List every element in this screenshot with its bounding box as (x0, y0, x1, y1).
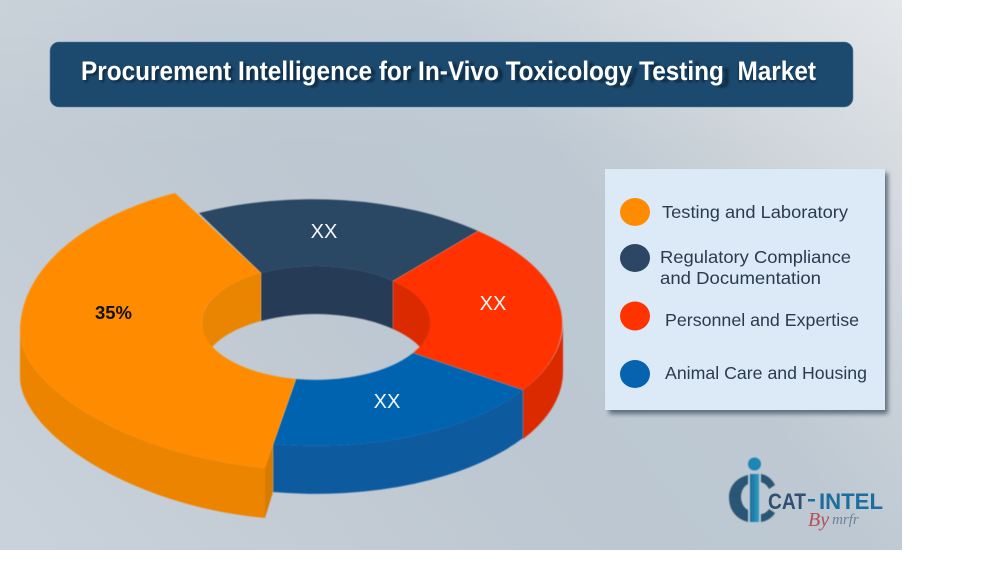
logo byline: mrfr (832, 512, 859, 528)
legend item: testing and laboratory (620, 198, 848, 226)
legend item: animal care and housing (620, 360, 867, 388)
logo byline: By (808, 509, 829, 531)
legend item: regulatory compliance and documentation: Regulatory Compliance (660, 247, 851, 267)
logo: CAT-INTEL by mrfr (729, 458, 883, 531)
value label: animal care XX: XX (374, 391, 400, 413)
logo icon (729, 458, 775, 522)
title: Procurement Intelligence for In-Vivo Toxicology Testing Market (81, 56, 816, 86)
segment: personnel and expertise (red) (393, 231, 563, 439)
legend item: regulatory compliance and documentation (620, 244, 851, 288)
value label: personnel XX: XX (480, 293, 506, 315)
value label: 35%: 35% (95, 302, 132, 323)
segment: animal care and housing (blue) (273, 353, 523, 494)
legend item: personnel and expertise: Personnel and Expertise (665, 310, 859, 330)
donut chart (20, 193, 563, 518)
title banner (50, 42, 853, 107)
title shadow: Procurement Intelligence for In-Vivo Toxicology Testing Market (83, 58, 816, 88)
logo wordmark: CAT: CAT (768, 489, 806, 514)
legend item: testing and laboratory: Testing and Laboratory (662, 202, 848, 222)
legend item: regulatory compliance and documentation: and Documentation (660, 268, 821, 288)
legend panel (605, 169, 888, 414)
logo wordmark: dash (808, 499, 815, 502)
value label: regulatory XX: XX (311, 221, 337, 243)
legend item: animal care and housing: Animal Care and Housing (665, 363, 867, 383)
logo wordmark: INTEL: INTEL (819, 489, 883, 514)
legend item: personnel and expertise (620, 302, 859, 330)
segment: regulatory compliance (navy) (199, 199, 478, 329)
segment: testing and laboratory (orange) (20, 193, 296, 518)
